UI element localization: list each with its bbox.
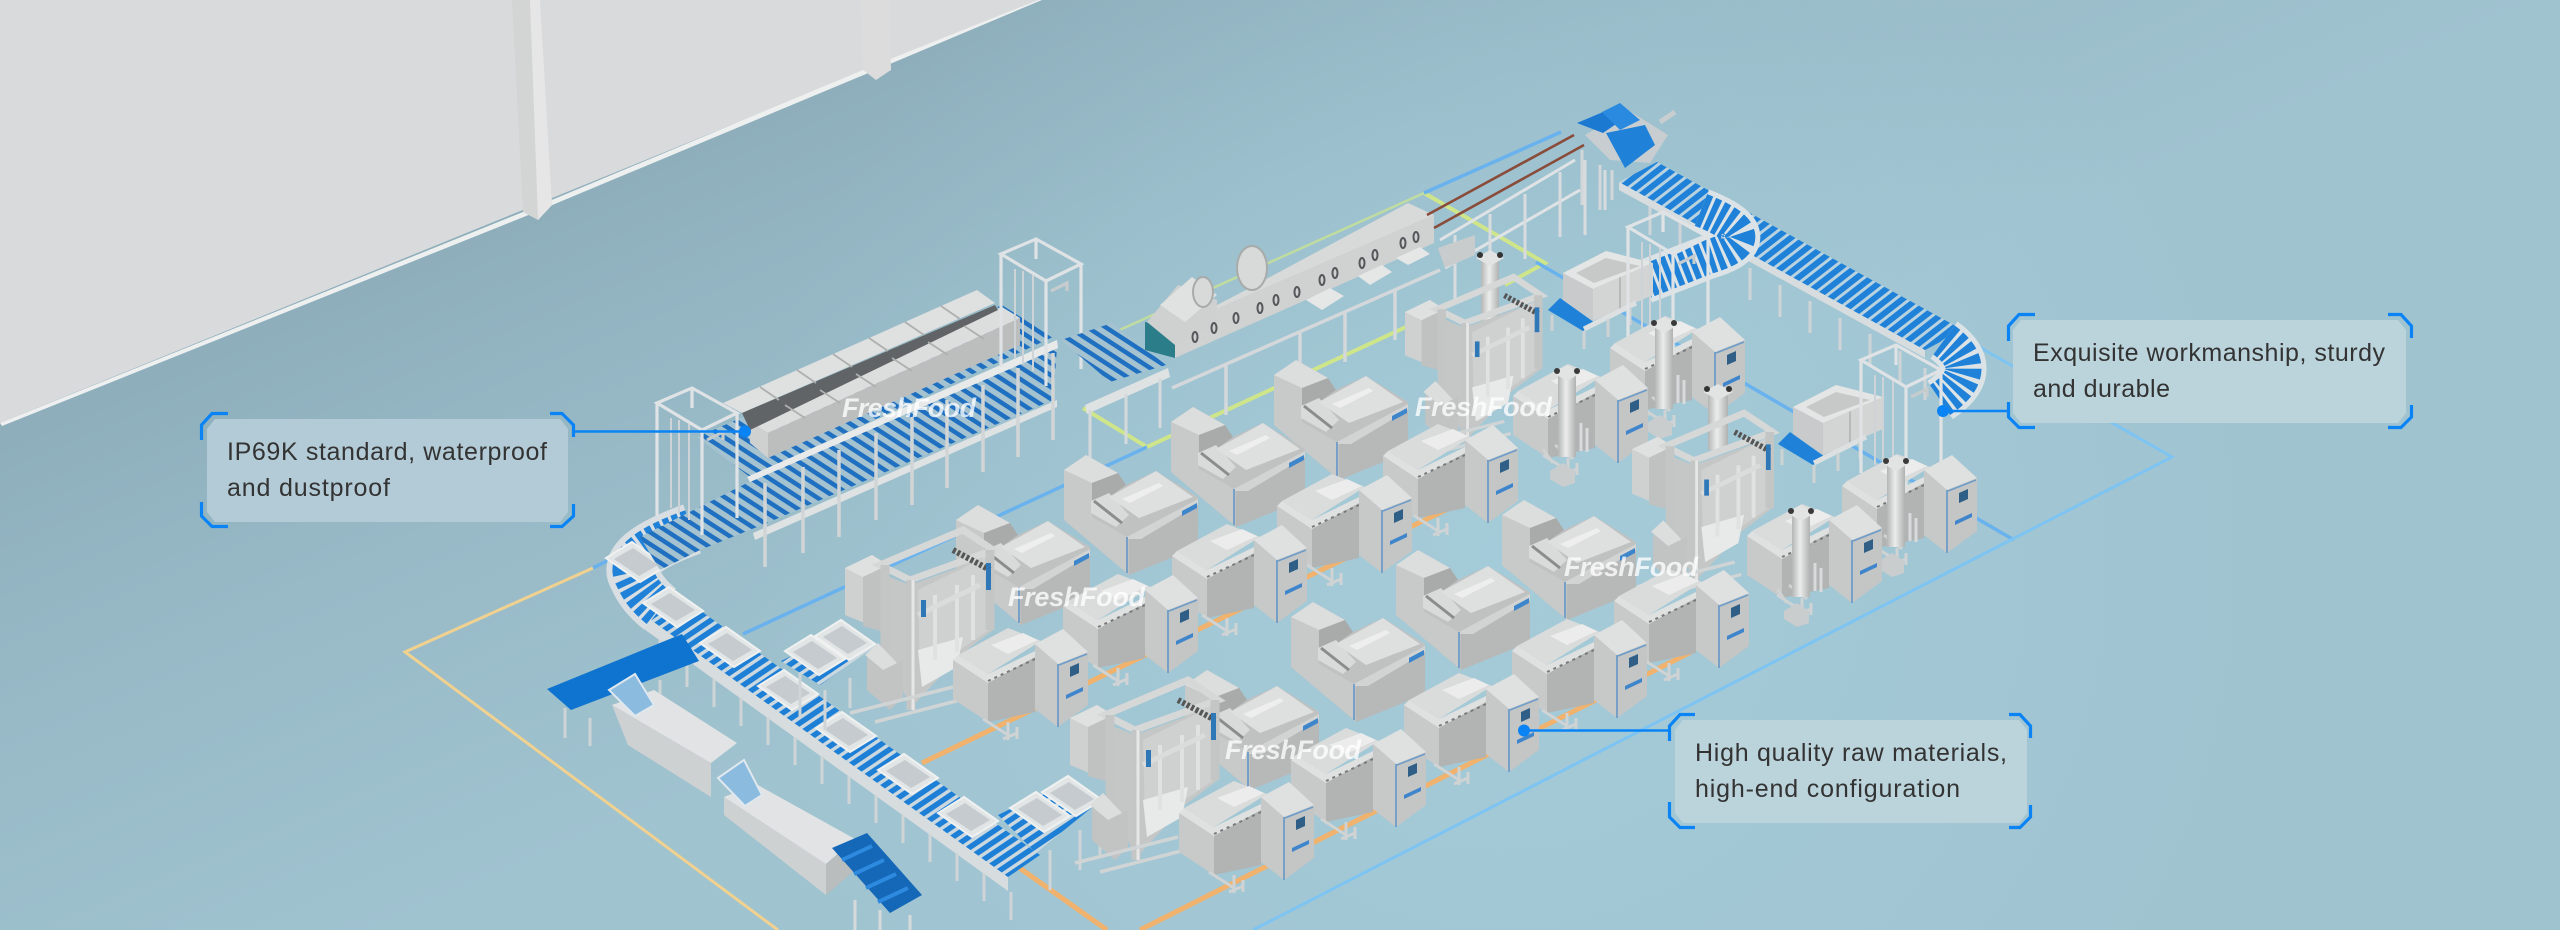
lift frames small (657, 388, 737, 535)
floor guide lines (405, 132, 2172, 930)
callout: workmanship (1937, 314, 2412, 428)
wall pillar left (512, 0, 552, 220)
rail and legs (747, 340, 1058, 482)
feeding belt (547, 634, 699, 746)
watermarks: FreshFood (1225, 735, 1362, 765)
callout: workmanship: and durable (2033, 375, 2170, 403)
mixing unit (1383, 424, 1518, 536)
trays on conveyor (606, 542, 998, 837)
machine: filter tower rear (1703, 384, 1733, 450)
mixing unit (1277, 474, 1412, 586)
mixing unit (1063, 574, 1198, 686)
feed conveyor with trays front (998, 776, 1102, 890)
callout: workmanship: Exquisite workmanship, sturdy (2033, 339, 2386, 367)
lift frame right (1861, 345, 1941, 492)
kettle unit behind lift (956, 505, 1090, 625)
mixing unit (1172, 524, 1307, 636)
watermarks: FreshFood (1008, 582, 1146, 612)
mixing unit (953, 628, 1088, 740)
upper storage conveyor (640, 290, 1058, 570)
tower unit right (1842, 454, 1977, 577)
mixing unit (1291, 728, 1426, 840)
oven feed conveyor (1061, 323, 1170, 460)
kettle unit (1291, 602, 1425, 722)
lift station upper (1405, 277, 1541, 454)
callout: materials: High quality raw materials, (1695, 739, 2007, 767)
mixing unit (1404, 673, 1539, 785)
kettle unit (1274, 360, 1408, 480)
callout: materials (1518, 714, 2030, 828)
right conveyor (1619, 162, 1964, 400)
oven tunnel (1145, 203, 1440, 415)
lift station left (845, 530, 993, 722)
lift station right (1632, 413, 1773, 595)
mixing unit (1614, 569, 1749, 681)
tray stack right (1778, 385, 1883, 483)
conveyor: bottom-left diagonal (632, 529, 1040, 920)
mixing unit (1512, 619, 1647, 731)
callout: waterproof: and dustproof (227, 474, 390, 502)
watermarks: FreshFood (842, 393, 976, 423)
conveyor curve (632, 529, 692, 609)
lift station front (1070, 680, 1218, 872)
back wall (0, 0, 1042, 426)
watermarks: FreshFood (1564, 552, 1698, 582)
tray block (768, 318, 1020, 458)
machine: filter tower (1476, 250, 1504, 326)
tower unit (1610, 316, 1745, 439)
washing machines (609, 674, 855, 895)
tower unit right front (1747, 504, 1882, 627)
callout: waterproof: IP69K standard, waterproof (227, 438, 547, 466)
tray stack upper (1548, 251, 1653, 349)
kettle unit (1064, 455, 1198, 575)
kettle unit (1171, 407, 1305, 527)
callout: materials: high-end configuration (1695, 775, 1960, 803)
kettle unit (1502, 500, 1636, 620)
incline conveyor (832, 833, 922, 930)
watermarks: FreshFood (1415, 392, 1552, 422)
kettle unit (1396, 550, 1530, 670)
feed conveyor with trays left (781, 620, 877, 730)
tower unit (1513, 364, 1648, 487)
wall pillar right (860, 0, 891, 80)
conveyor head unit (1577, 103, 1675, 210)
mixing unit front (1179, 781, 1314, 893)
callout: waterproof (202, 414, 751, 526)
inclined transfer belts (1427, 135, 1605, 300)
watermarks (842, 392, 1698, 765)
kettle unit front (1185, 670, 1319, 790)
branch curve (1644, 210, 1738, 282)
lift frame upper right (1628, 212, 1708, 359)
lift frame near oven (1001, 239, 1081, 386)
